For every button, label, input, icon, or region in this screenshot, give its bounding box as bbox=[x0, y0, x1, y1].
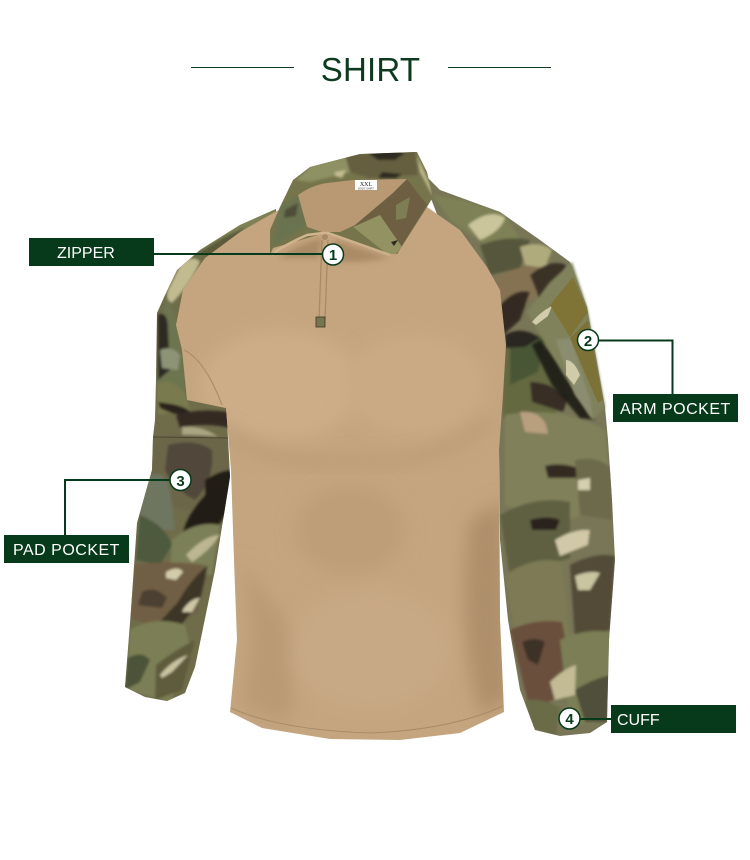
callout: zipper: 1 bbox=[329, 247, 337, 264]
callout: arm pocket: 2 bbox=[584, 333, 592, 350]
title: SHIRT bbox=[321, 51, 420, 88]
callout: pad pocket: PAD POCKET bbox=[13, 542, 120, 559]
shirt illustration bbox=[4, 145, 738, 745]
arm pocket bbox=[527, 262, 605, 420]
right camouflage sleeve bbox=[428, 178, 615, 736]
size tag bbox=[355, 180, 377, 190]
callout: cuff: CUFF bbox=[617, 712, 660, 729]
zipper bbox=[316, 234, 328, 327]
underarm seam bbox=[184, 350, 222, 405]
tan torso bbox=[176, 207, 506, 740]
left camouflage sleeve bbox=[120, 200, 280, 710]
sleeve shadow bbox=[532, 340, 596, 420]
callout: pad pocket: 3 bbox=[176, 473, 185, 490]
callout: arm pocket bbox=[578, 330, 738, 422]
hem bbox=[231, 706, 503, 733]
callout: cuff bbox=[559, 705, 736, 733]
callout: zipper: ZIPPER bbox=[57, 245, 115, 262]
collar bbox=[270, 152, 433, 254]
size tag: XXL bbox=[360, 182, 372, 188]
callout: arm pocket: ARM POCKET bbox=[620, 401, 731, 418]
right collar leaf bbox=[353, 179, 427, 254]
collar trim bbox=[272, 233, 390, 255]
callout: pad pocket bbox=[4, 470, 191, 563]
inside of neck bbox=[298, 179, 407, 232]
size tag: BODY SHIRT bbox=[358, 186, 374, 190]
callout: cuff: 4 bbox=[565, 711, 574, 728]
callout: zipper bbox=[29, 238, 344, 266]
